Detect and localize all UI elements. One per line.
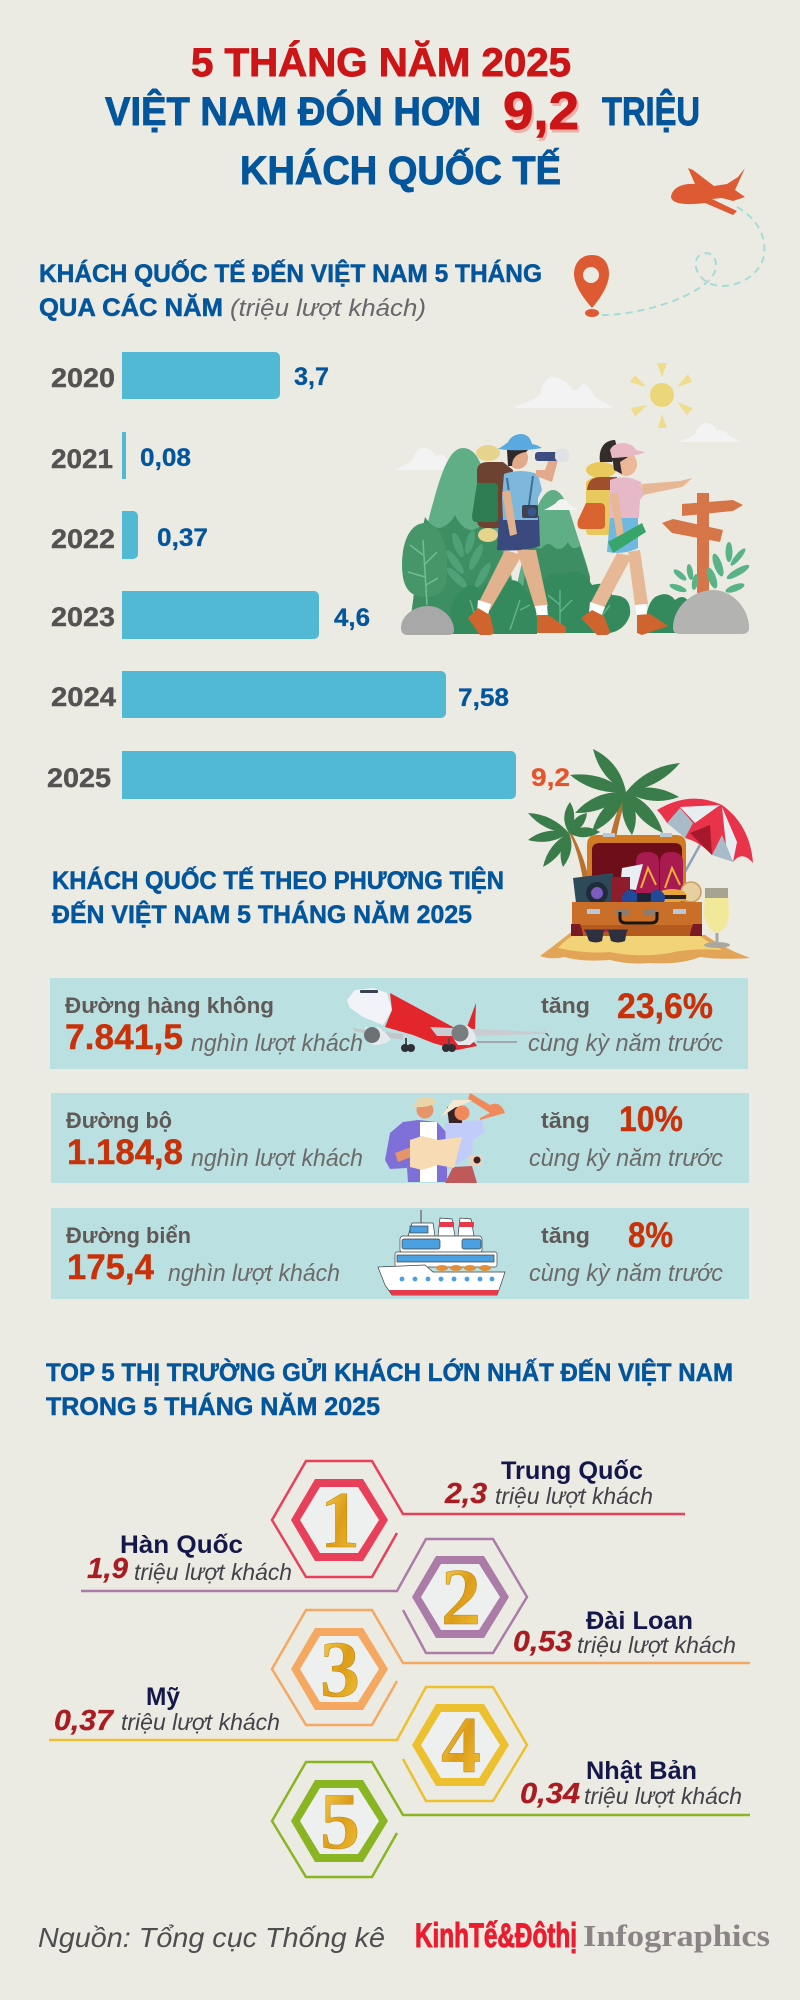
bar 2024: 2024 [51,682,116,712]
sunglasses [584,929,628,942]
ranking 1: China: 2,3 [444,1478,487,1510]
source: Nguồn: Tổng cục Thống kê [38,1922,385,1953]
ranking 1: China [272,1457,685,1577]
ranking 2: South Korea: triệu lượt khách [134,1559,292,1585]
sand [540,933,750,964]
icon: location pin [574,255,609,317]
heading: arrivals by year: (triệu lượt khách) [230,295,426,322]
icon: sun [630,363,693,428]
bar 2020: 2020 [51,363,115,393]
ranking 5: Japan: 5 [320,1778,360,1866]
panel: air transport: cùng kỳ năm trước [528,1030,723,1057]
ranking 2: South Korea: 2 [441,1554,481,1642]
panel: road transport: 10% [619,1100,683,1139]
suitcase [571,833,702,936]
man hiker [468,434,569,635]
panel: air transport: Đường hàng không [65,993,274,1018]
signpost [662,493,743,593]
heading: top 5 markets: TOP 5 THỊ TRƯỜNG GỬI KHÁCH LỚN NHẤT ĐẾN VIỆT NAM [46,1357,733,1387]
ranking 4: United States: Mỹ [146,1683,180,1711]
heading: arrivals by transport: ĐẾN VIỆT NAM 5 THÁNG NĂM 2025 [52,899,472,929]
panel: air transport: 7.841,5 [65,1018,183,1057]
ranking 4: United States: 0,37 [54,1705,115,1737]
ranking 1: China: 1 [320,1477,360,1565]
bar 2020: 3,7 [294,363,329,391]
heading: arrivals by transport: KHÁCH QUỐC TẾ THEO PHƯƠNG TIỆN [52,865,504,895]
palm trees [528,749,680,880]
panel: sea transport: cùng kỳ năm trước [529,1260,723,1287]
bar 2023: 2023 [51,602,115,632]
ranking 3: Taiwan: Đài Loan [586,1607,693,1635]
panel: road transport: tăng [541,1108,590,1133]
bar 2022: 2022 [51,524,115,554]
bar 2022: 0,37 [157,524,208,552]
bar 2023 [51,591,370,639]
rocks [401,606,454,635]
ranking 4: United States [49,1683,527,1801]
bar 2021: 2021 [51,444,113,474]
bar 2023: 4,6 [334,604,370,632]
heading: arrivals by year: QUA CÁC NĂM [39,293,223,322]
ranking 4: United States: 4 [441,1702,481,1790]
panel: air transport [50,978,748,1069]
heading: top 5 markets [46,1357,733,1421]
panel: road transport [51,1093,749,1183]
mountains [410,448,520,630]
ranking 1: China: Trung Quốc [501,1457,643,1485]
panel: road transport: Đường bộ [66,1108,172,1133]
bar 2024: 7,58 [458,684,509,712]
logo: KinhTế&Đôthị [415,1917,577,1955]
woman hiker [578,440,692,635]
title [105,40,700,193]
icon: red airplane [347,988,548,1052]
panel: sea transport: 8% [628,1216,673,1255]
cloud over small peak [544,499,577,510]
heading: top 5 markets: TRONG 5 THÁNG NĂM 2025 [46,1392,380,1421]
panel: road transport: cùng kỳ năm trước [529,1145,723,1172]
heading: arrivals by year: KHÁCH QUỐC TẾ ĐẾN VIỆT NAM 5 THÁNG [39,258,542,288]
bar 2025: 9,2 [531,764,570,792]
bar 2021 [51,432,191,479]
icon: airplane with dashed route [602,168,764,315]
ranking 5: Japan: Nhật Bản [586,1757,697,1785]
ferns: right [669,542,751,595]
panel: sea transport: Đường biển [66,1223,191,1248]
panel: sea transport: tăng [541,1223,590,1248]
title: 5 THÁNG NĂM 2025 [191,40,571,85]
heading: arrivals by transport [52,865,504,929]
ranking 2: South Korea [81,1531,527,1653]
title: VIỆT NAM ĐÓN HƠN [105,88,481,134]
panel: sea transport: 175,4 [67,1248,155,1287]
icon: cruise ship [378,1210,505,1295]
panel: air transport: 23,6% [617,987,713,1026]
illustration: hikers with mountains and signpost [394,363,751,635]
title: 9,2 [503,82,579,141]
cocktail glass [704,888,730,948]
logo [415,1917,770,1955]
bar chart: arrivals by year [47,352,570,799]
title: 9,2 [505,85,581,144]
bar 2020 [51,352,329,399]
ranking 1: China: triệu lượt khách [495,1483,653,1509]
ranking 3: Taiwan: 0,53 [513,1626,572,1658]
clouds [394,377,740,470]
panel: road transport: nghìn lượt khách [191,1145,363,1172]
panel: air transport: tăng [541,993,590,1018]
title: TRIỆU [602,88,700,134]
panel: air transport: nghìn lượt khách [191,1030,363,1057]
ranking 2: South Korea: 1,9 [87,1553,128,1585]
fern: middle [444,529,493,591]
ranking 3: Taiwan: triệu lượt khách [577,1632,736,1658]
ranking 3: Taiwan: 3 [320,1626,360,1714]
umbrella [657,799,753,872]
panel: sea transport [51,1208,749,1299]
heading: arrivals by year [39,258,542,322]
logo: Infographics [583,1918,770,1953]
tall bush [402,523,447,597]
ranking 4: United States: triệu lượt khách [121,1709,280,1735]
ranking 5: Japan: 0,34 [520,1778,580,1810]
ranking 2: South Korea: Hàn Quốc [120,1531,243,1559]
ranking 5: Japan: triệu lượt khách [584,1783,742,1809]
bushes [450,580,537,634]
title: KHÁCH QUỐC TẾ [240,147,561,193]
bar 2025 [47,751,570,799]
bar 2024 [51,671,509,718]
panel: sea transport: nghìn lượt khách [168,1260,340,1287]
icon: tourist couple [385,1093,505,1183]
ranking 3: Taiwan [272,1607,750,1725]
bar 2025: 2025 [47,763,111,793]
bar 2021: 0,08 [140,444,191,472]
ranking 5: Japan [272,1757,750,1877]
bar 2022 [51,511,208,559]
illustration: beach suitcase with palms and umbrella [528,749,753,964]
panel: road transport: 1.184,8 [67,1133,183,1172]
